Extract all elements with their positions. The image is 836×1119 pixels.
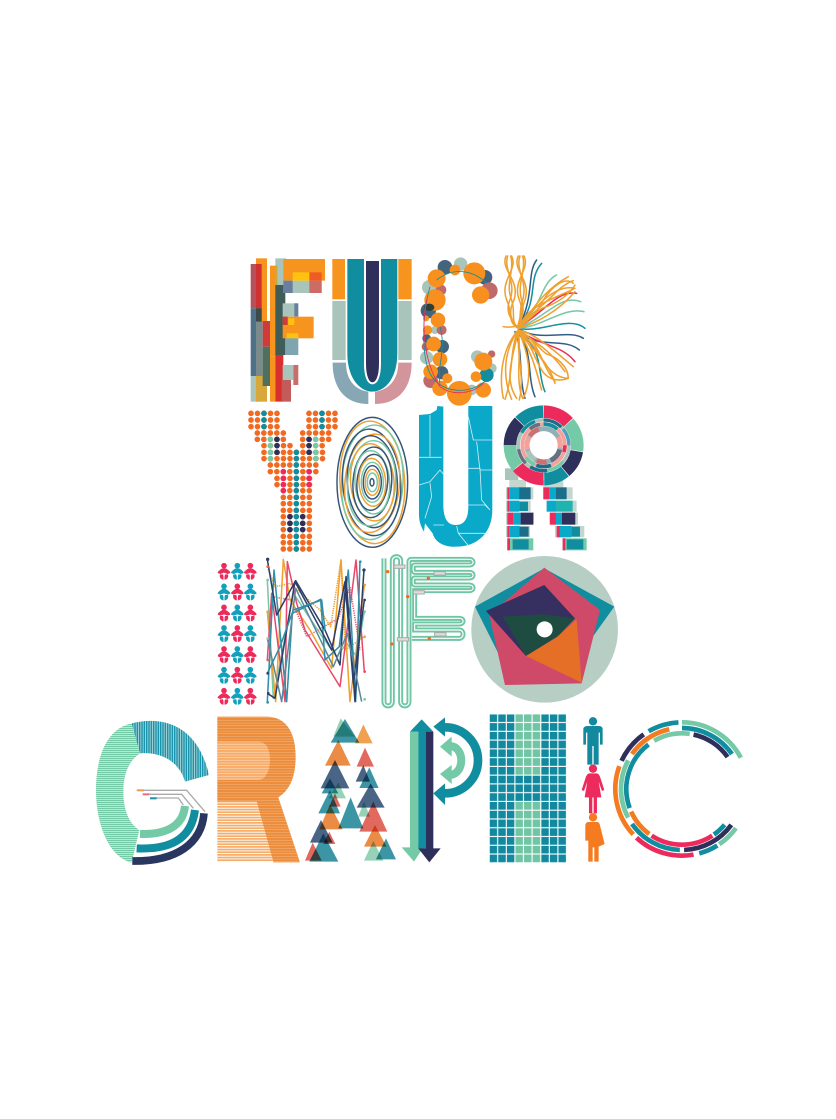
letter I: baby icons: [218, 563, 257, 705]
letter U: map: [419, 406, 492, 547]
word: YOUR: [251, 398, 591, 550]
stacked bars: right leg: [543, 480, 587, 550]
letter P: arrows: [402, 717, 478, 862]
letter I: people: [582, 717, 605, 862]
word: GRA: [96, 717, 396, 863]
word: PHIC: [402, 695, 776, 883]
letter F: overlapping bars: [251, 258, 325, 402]
word: INFO: [218, 556, 618, 706]
letter R: sunburst bowl and stacked-bar legs: [496, 398, 591, 550]
letter H: square grid: [490, 714, 567, 863]
woman icon: [582, 764, 604, 813]
sunburst inner ring: [520, 422, 567, 469]
letter F: serpentine route: [384, 557, 473, 706]
letter O: concentric rings: [337, 417, 408, 547]
letter G: hatched arcs and leader lines: [96, 721, 209, 863]
letter O: radar chart in circle: [471, 556, 618, 703]
word: FUCK: [251, 256, 585, 406]
sunburst ring 2: [508, 410, 579, 481]
stacked bars: left leg: [505, 468, 534, 550]
letter R: striped bars: [217, 717, 300, 862]
sunburst ring 3: [514, 415, 574, 475]
man icon: [583, 717, 603, 765]
letter A: triangles: [305, 718, 396, 862]
letter Y: dot matrix: [251, 413, 335, 549]
letter C: bubble chart: [420, 257, 498, 406]
letter C: segmented rings: [588, 695, 776, 883]
letter K: flow lines: [501, 256, 585, 400]
letter U: segmented bands: [332, 259, 412, 404]
woman icon: [585, 813, 605, 862]
sunburst outer ring: [496, 398, 591, 493]
letter N: line chart: [266, 558, 366, 704]
